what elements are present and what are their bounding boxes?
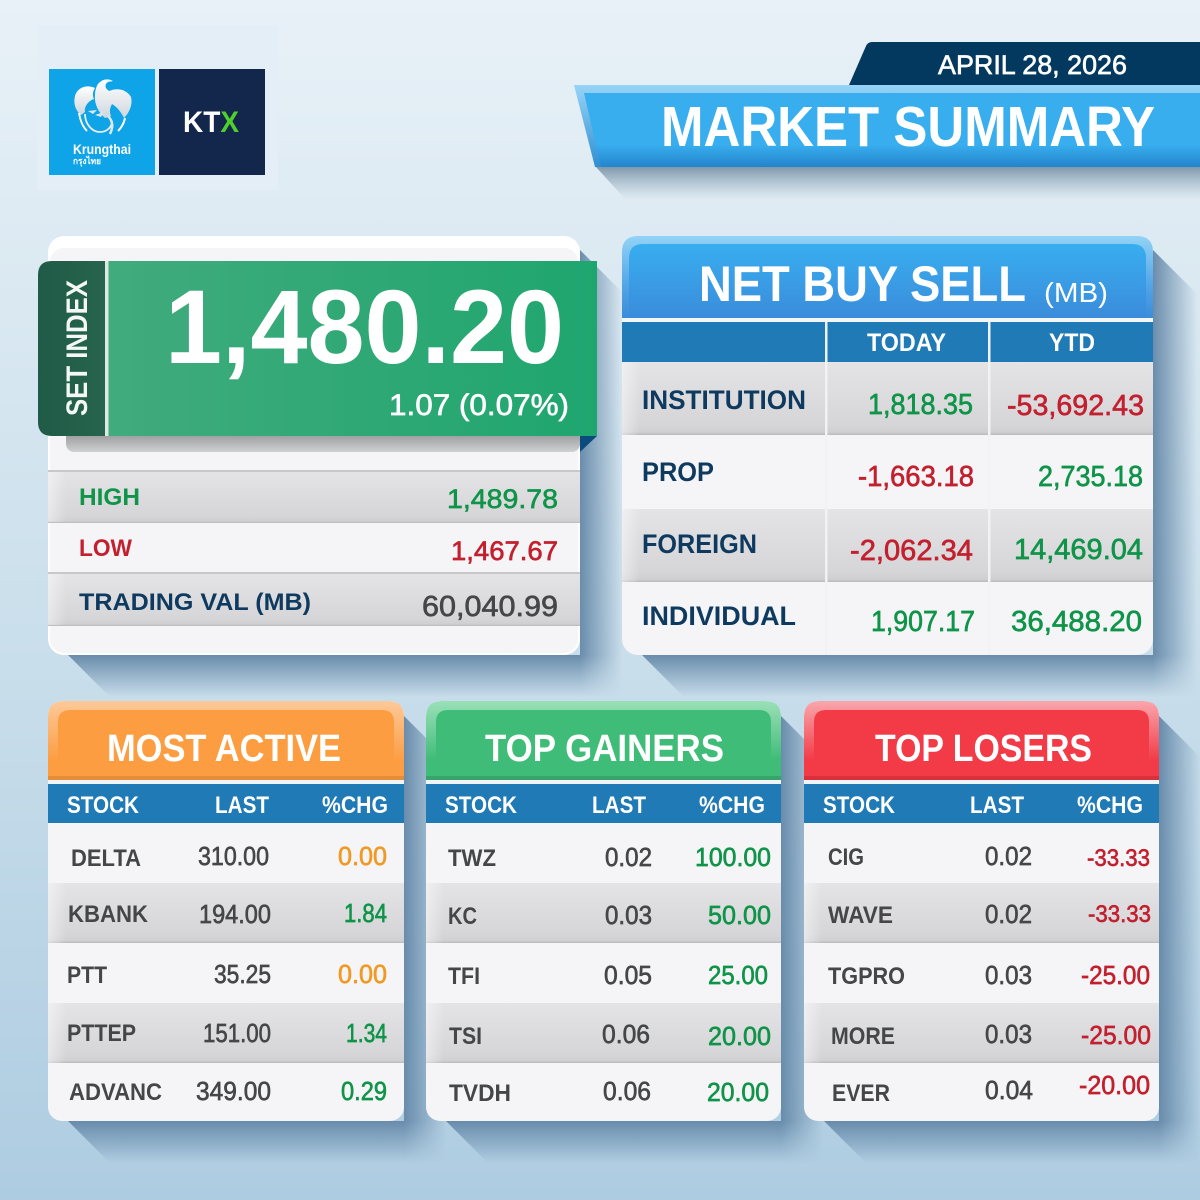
row: PTT: PTT xyxy=(67,962,107,989)
row: TGPRO: 0.03 xyxy=(985,960,1032,990)
row: high: HIGH xyxy=(79,484,140,511)
row: foreign xyxy=(622,509,1153,582)
wordmark: Thai name: กรุงไทย xyxy=(73,155,101,167)
row: TFI: 25.00 xyxy=(708,960,768,990)
card shadow xyxy=(68,716,446,1163)
card body xyxy=(48,236,580,655)
icon: garuda bird xyxy=(74,79,132,134)
header banner xyxy=(574,42,1200,200)
row: ADVANC xyxy=(69,1076,387,1106)
row: low xyxy=(79,535,558,566)
card shadow xyxy=(446,716,823,1163)
row: individual: 36,488.20 xyxy=(1011,606,1142,638)
logo: KTX: KTX xyxy=(183,106,239,139)
row: WAVE: 0.02 xyxy=(985,899,1032,929)
row: WAVE: WAVE xyxy=(828,902,893,929)
row: EVER: 0.04 xyxy=(985,1075,1033,1105)
row: TFI: 0.05 xyxy=(604,960,652,990)
row: PTTEP xyxy=(48,1003,404,1063)
wordmark: Krungthai: Krungthai xyxy=(73,141,131,157)
row: EVER xyxy=(832,1070,1150,1107)
row: TGPRO: TGPRO xyxy=(828,963,905,990)
row: TSI: TSI xyxy=(449,1023,482,1050)
row: low: 1,467.67 xyxy=(451,536,558,566)
row: PTT xyxy=(67,959,387,989)
row: individual xyxy=(642,601,1142,638)
row: institution xyxy=(622,362,1153,435)
row: foreign: -2,062.34 xyxy=(850,535,973,567)
label tab: SET INDEX xyxy=(38,261,108,436)
title bar xyxy=(574,85,1200,167)
row: WAVE xyxy=(804,883,1159,943)
row: KC: KC xyxy=(448,903,477,930)
banner shadow xyxy=(596,167,1200,200)
row: CIG: 0.02 xyxy=(985,841,1032,871)
row: KBANK: KBANK xyxy=(68,901,149,928)
row: WAVE: -33.33 xyxy=(1088,901,1151,928)
row: ADVANC: 0.29 xyxy=(341,1076,387,1106)
logo group xyxy=(37,25,278,190)
row: DELTA xyxy=(71,841,387,872)
row: PTTEP: 1.34 xyxy=(346,1018,387,1048)
row: DELTA: DELTA xyxy=(71,845,141,872)
heading xyxy=(622,236,1153,318)
row: CIG: CIG xyxy=(828,844,864,871)
date tab: APRIL 28, 2026 xyxy=(938,50,1127,80)
row: trading value xyxy=(48,572,580,626)
row: ADVANC: ADVANC xyxy=(69,1079,162,1106)
column headers: STOCK xyxy=(445,792,518,819)
column headers xyxy=(804,780,1159,823)
heading: (MB) xyxy=(1044,277,1108,308)
row: TWZ: TWZ xyxy=(448,845,496,872)
title bar: MARKET SUMMARY xyxy=(661,95,1155,159)
row: TWZ xyxy=(448,842,771,872)
row: TGPRO xyxy=(828,960,1150,990)
column headers: TODAY xyxy=(867,329,946,357)
column dividers xyxy=(825,322,990,655)
index change: 1.07 (0.07%) xyxy=(389,389,569,422)
row: EVER: -20.00 xyxy=(1079,1070,1150,1100)
heading: TOP GAINERS xyxy=(485,728,724,770)
row: KBANK: 194.00 xyxy=(199,899,271,929)
row: TSI: 0.06 xyxy=(602,1019,650,1049)
row: TFI xyxy=(448,960,768,990)
row: KC xyxy=(426,883,781,943)
row: foreign: 14,469.04 xyxy=(1014,534,1143,566)
row: TFI: TFI xyxy=(448,963,480,990)
column headers: %CHG xyxy=(699,792,765,819)
card shadow xyxy=(824,716,1200,1163)
row: prop: PROP xyxy=(642,457,714,487)
banner shadow strip xyxy=(66,430,580,452)
row: TVDH: 20.00 xyxy=(707,1077,769,1107)
card body xyxy=(48,701,404,1121)
index banner xyxy=(38,261,597,436)
row: MORE: MORE xyxy=(831,1023,895,1050)
column headers: STOCK xyxy=(823,792,896,819)
row: TSI: 20.00 xyxy=(708,1021,771,1051)
panel: top losers xyxy=(804,701,1200,1163)
logo: Krungthai xyxy=(49,69,155,175)
row: individual: INDIVIDUAL xyxy=(642,601,796,631)
card body xyxy=(426,701,781,1121)
heading xyxy=(804,701,1159,780)
row: high: 1,489.78 xyxy=(447,484,558,514)
row: PTT: 35.25 xyxy=(214,959,271,989)
row: prop xyxy=(642,457,1143,493)
row: CIG xyxy=(828,841,1150,872)
row: PTTEP: 151.00 xyxy=(203,1018,271,1048)
index value: 1,480.20 xyxy=(165,269,564,386)
heading: MOST ACTIVE xyxy=(107,728,341,770)
column headers xyxy=(622,318,1153,362)
card body xyxy=(804,701,1159,1121)
row: TVDH xyxy=(449,1076,769,1107)
heading xyxy=(48,701,404,780)
row: institution: -53,692.43 xyxy=(1007,390,1144,422)
column headers: %CHG xyxy=(1077,792,1143,819)
panel: net buy sell xyxy=(622,236,1197,697)
card shadow xyxy=(642,250,1197,697)
column headers xyxy=(426,780,781,823)
heading xyxy=(426,701,781,780)
column headers: %CHG xyxy=(322,792,388,819)
row: ADVANC: 349.00 xyxy=(196,1076,271,1106)
row: individual: 1,907.17 xyxy=(871,606,975,638)
row: prop: 2,735.18 xyxy=(1038,461,1143,493)
row: institution: 1,818.35 xyxy=(868,389,973,421)
row: low: LOW xyxy=(79,535,132,562)
row: DELTA: 0.00 xyxy=(338,841,387,871)
row: PTT: 0.00 xyxy=(338,959,387,989)
card shadow xyxy=(68,250,622,697)
row: TSI xyxy=(426,1003,781,1063)
row: KC: 0.03 xyxy=(605,900,652,930)
panel: SET index xyxy=(38,236,622,697)
row: TVDH: 0.06 xyxy=(603,1076,651,1106)
row: DELTA: 310.00 xyxy=(198,841,269,871)
row: TGPRO: -25.00 xyxy=(1081,960,1150,990)
row: MORE: 0.03 xyxy=(985,1019,1032,1049)
heading: TOP LOSERS xyxy=(875,728,1092,770)
row: PTTEP: PTTEP xyxy=(67,1020,136,1047)
column headers: LAST xyxy=(970,792,1024,819)
date tab xyxy=(849,42,1200,85)
column headers: YTD xyxy=(1049,329,1095,357)
row: prop: -1,663.18 xyxy=(858,461,974,493)
row: TVDH: TVDH xyxy=(449,1080,511,1107)
row: high xyxy=(48,470,580,523)
row: MORE: -25.00 xyxy=(1081,1020,1151,1050)
row: foreign: FOREIGN xyxy=(642,529,757,559)
column headers: STOCK xyxy=(67,792,140,819)
row: TWZ: 100.00 xyxy=(695,842,771,872)
row: KBANK: 1.84 xyxy=(344,898,387,928)
column headers: LAST xyxy=(592,792,646,819)
row: trading value: TRADING VAL (MB) xyxy=(79,589,311,616)
row: CIG: -33.33 xyxy=(1087,845,1150,872)
row: trading value: 60,040.99 xyxy=(422,591,558,623)
logo: KTX xyxy=(159,69,265,175)
panel: most active xyxy=(48,701,446,1163)
heading: NET BUY SELL xyxy=(699,256,1026,312)
label tab: SET INDEX: SET INDEX xyxy=(61,280,94,416)
row: KBANK xyxy=(48,883,404,943)
banner fold xyxy=(580,436,597,452)
row: KC: 50.00 xyxy=(708,900,771,930)
row: institution: INSTITUTION xyxy=(642,385,806,415)
row: MORE xyxy=(804,1003,1159,1063)
panel: top gainers xyxy=(426,701,823,1163)
row: TWZ: 0.02 xyxy=(605,842,652,872)
column headers xyxy=(48,780,404,823)
row: EVER: EVER xyxy=(832,1080,890,1107)
card body xyxy=(622,236,1153,655)
column headers: LAST xyxy=(215,792,269,819)
